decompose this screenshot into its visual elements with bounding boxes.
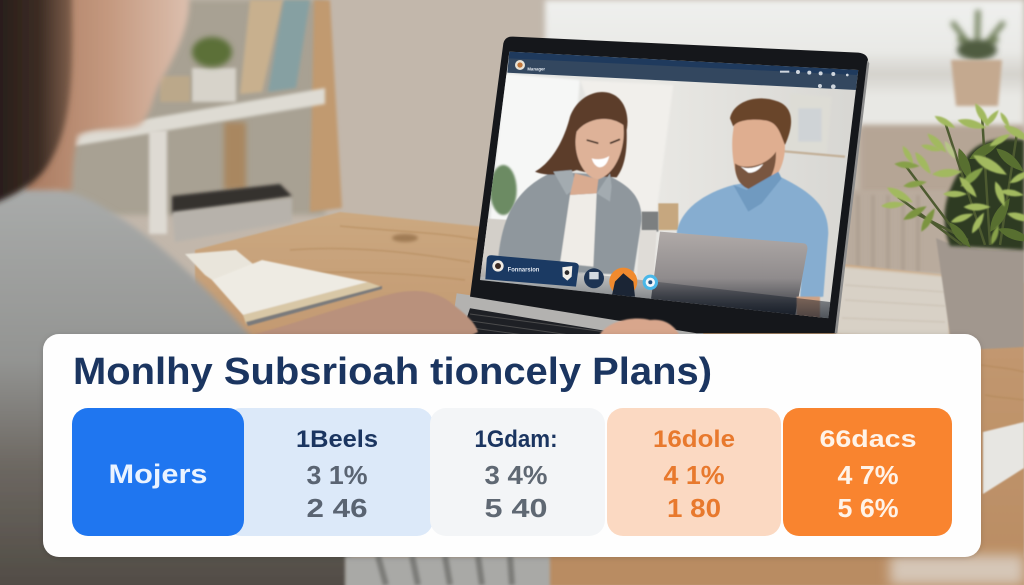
desk — [195, 212, 1024, 585]
man's laptop — [650, 232, 807, 317]
call app header bar: Manager — [527, 67, 545, 72]
laptop on desk — [450, 37, 870, 338]
column: light blue plan: 3 1% — [306, 460, 368, 490]
man — [677, 98, 828, 300]
column: blue label — [72, 408, 244, 536]
column: blue label: Mojers — [108, 459, 208, 489]
hand on keyboard — [255, 291, 680, 336]
call app bottom widget — [485, 255, 658, 297]
window plant — [951, 10, 1004, 106]
screen video call — [480, 52, 858, 318]
plant with pot — [881, 102, 1024, 350]
column: gray plan: 3 4% — [484, 460, 548, 490]
column: peach plan: 16dole — [653, 426, 735, 453]
call app header bar — [507, 52, 858, 90]
column: orange plan: 66dacs — [820, 426, 916, 453]
open notebook — [185, 250, 382, 326]
column: gray plan — [430, 408, 605, 536]
panel: subscription plans card — [43, 334, 981, 557]
column: light blue plan: 1Beels — [296, 426, 378, 453]
woman — [498, 92, 642, 275]
bookshelf — [72, 0, 342, 242]
column: light blue plan — [225, 408, 433, 536]
column: peach plan — [607, 408, 781, 536]
column: gray plan: 1Gdam: — [474, 426, 558, 453]
call app bottom widget: Fonnarsion — [508, 267, 539, 274]
column: peach plan: 4 1% — [664, 460, 724, 490]
foreground person, blurred — [0, 0, 550, 585]
laptop lid — [470, 37, 868, 333]
column: orange plan — [783, 408, 952, 536]
column: orange plan: 5 6% — [838, 493, 898, 523]
title: Monlhy Subsrioah tioncely Plans) — [73, 351, 712, 393]
column: light blue plan: 2 46 — [306, 493, 368, 523]
column: peach plan: 1 80 — [667, 493, 721, 523]
column: orange plan: 4 7% — [838, 460, 898, 490]
column: gray plan: 5 40 — [484, 493, 548, 523]
